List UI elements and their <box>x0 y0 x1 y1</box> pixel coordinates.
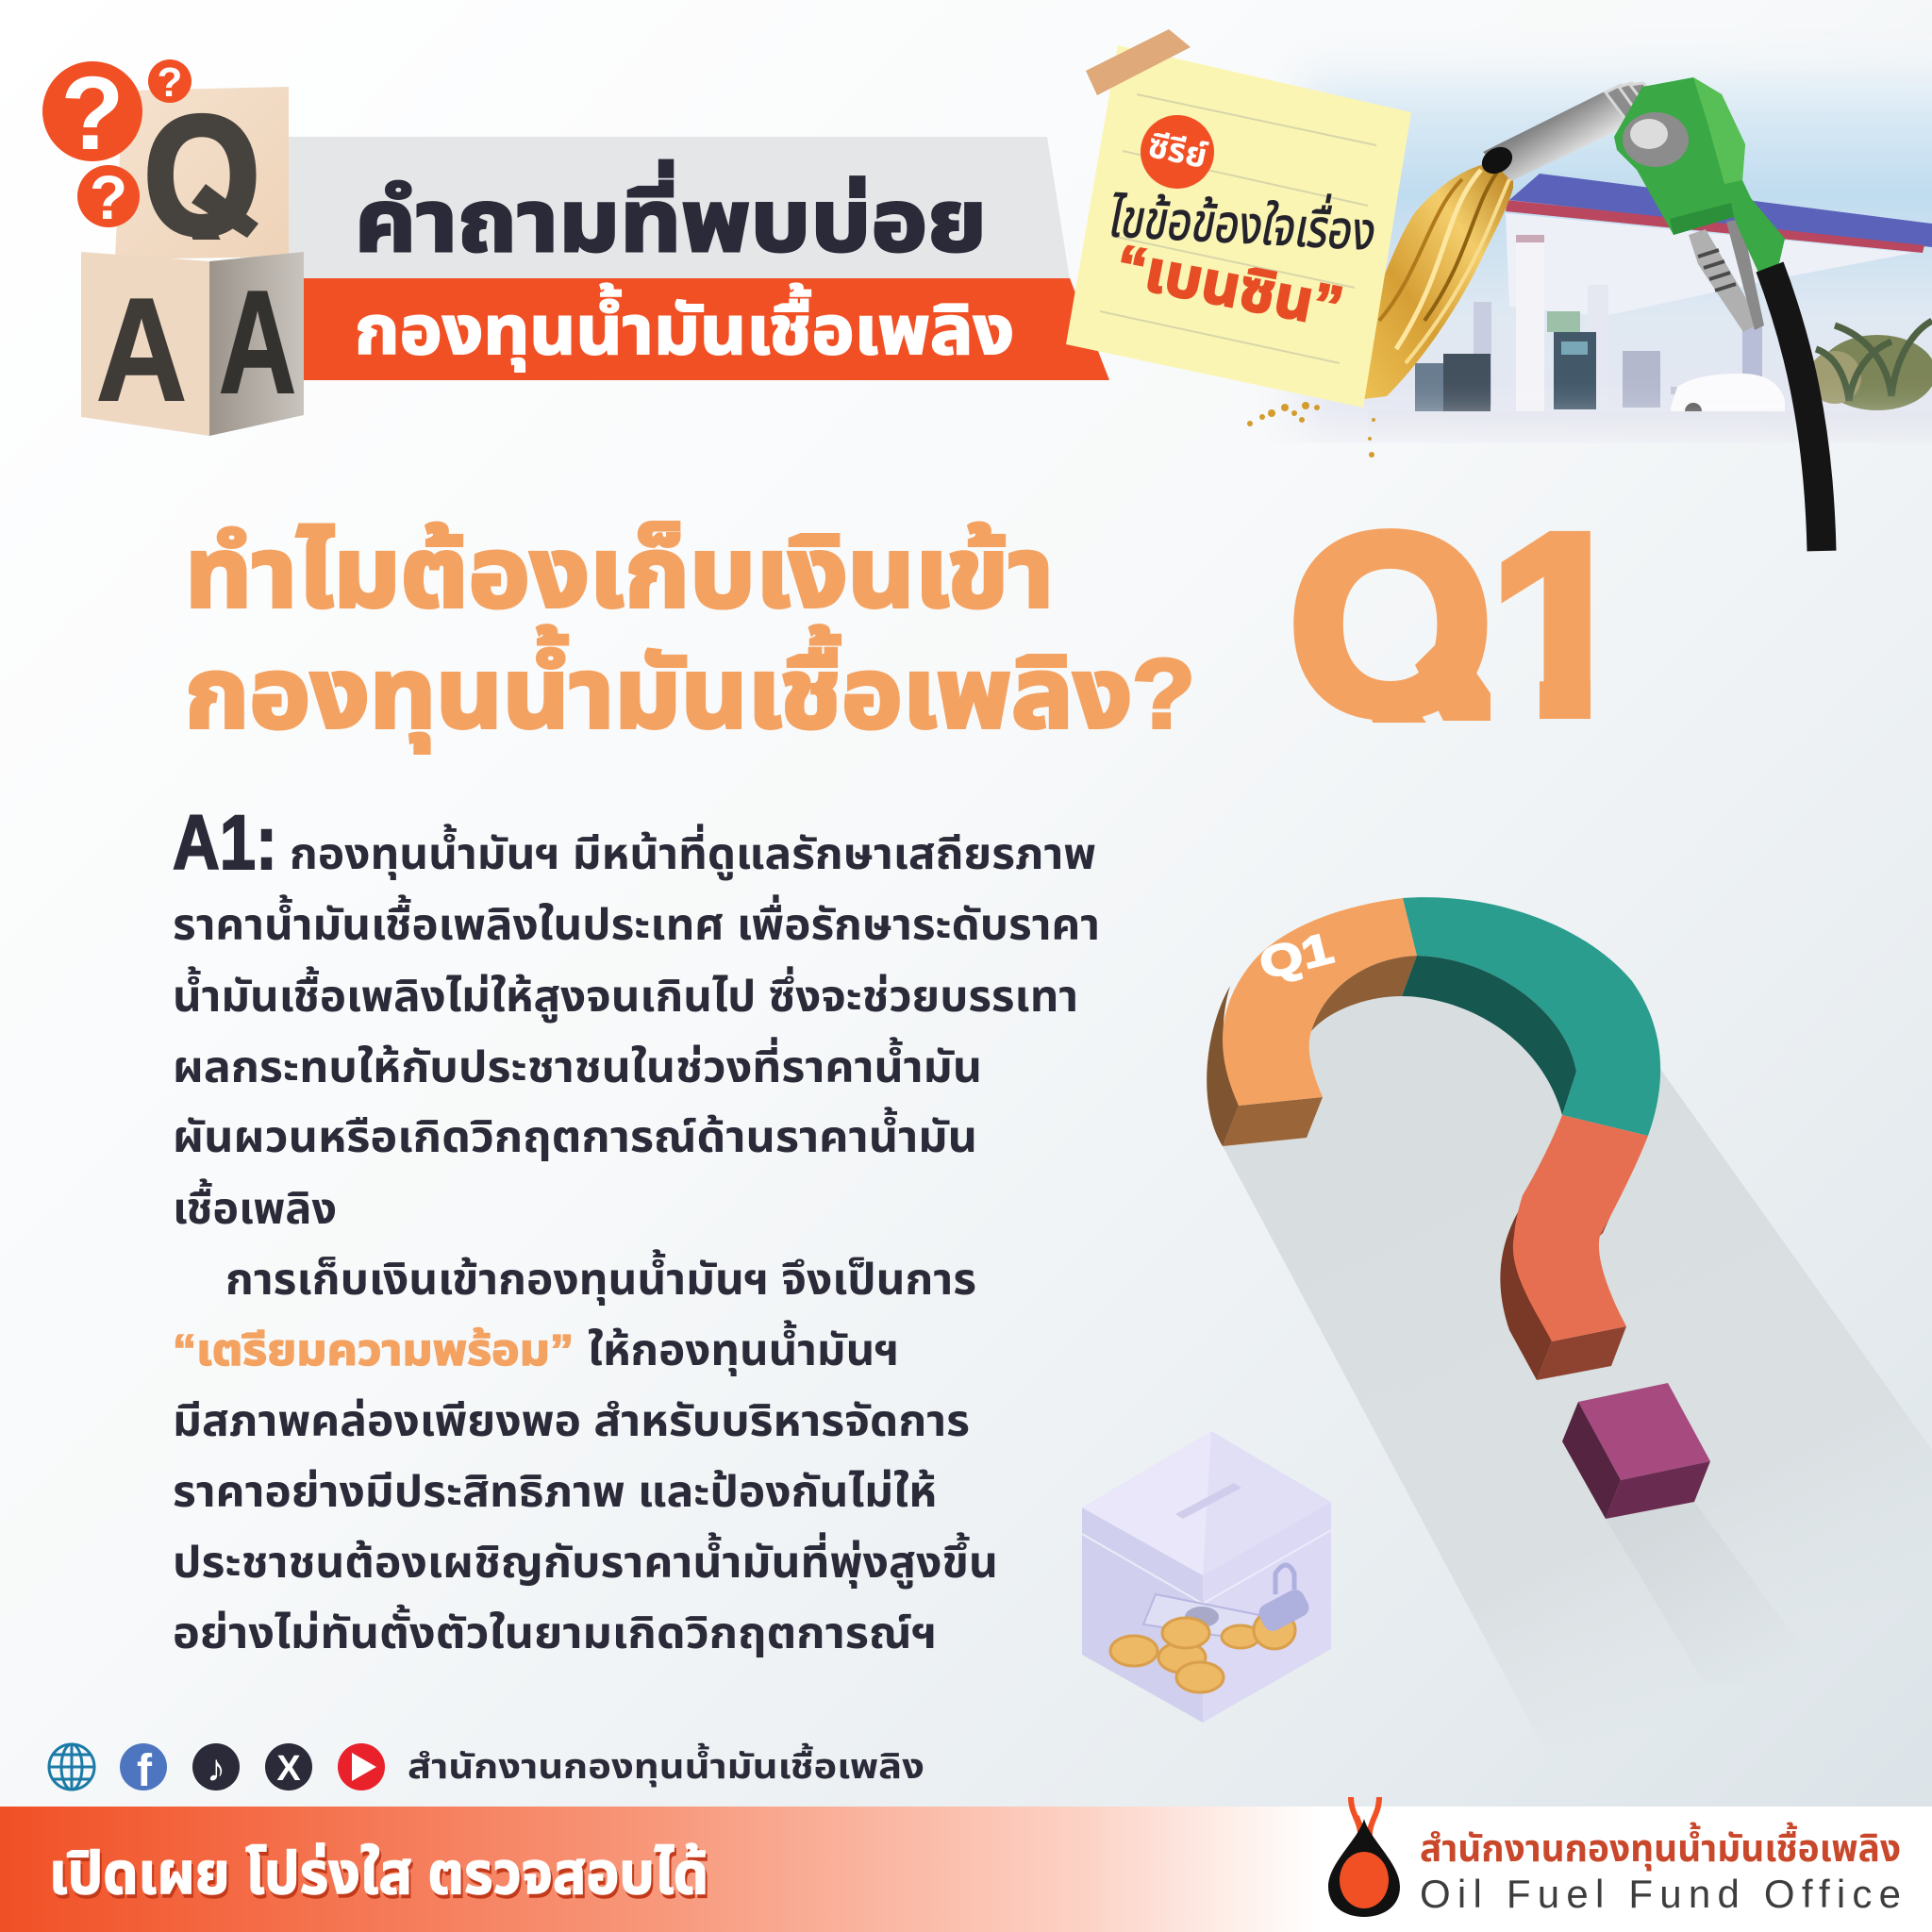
question bubble large <box>42 56 142 172</box>
heading line one: ทำไมต้องเก็บเงินเข้า <box>185 519 1054 628</box>
heading: frequently asked questions: คำถามที่พบบ่อย <box>355 160 987 270</box>
answer text block: อย่างไม่ทันตั้งตัวในยามเกิดวิกฤตการณ์ฯ <box>173 1605 937 1657</box>
icon: facebook <box>120 1743 167 1796</box>
box right face <box>1203 1502 1331 1723</box>
big Q1 label <box>1293 528 1591 723</box>
teal segment inner side <box>1402 956 1576 1115</box>
block A left face <box>81 252 209 436</box>
answer text block: ราคาน้ำมันเชื้อเพลิงในประเทศ เพื่อรักษาระดับราคา <box>173 894 1100 949</box>
logo Thai name: สำนักงานกองทุนน้ำมันเชื้อเพลิง <box>1420 1822 1901 1872</box>
footer bar <box>0 1807 1932 1932</box>
logo oil drop <box>1328 1819 1400 1917</box>
A1 label: A1: <box>173 800 277 886</box>
icon: X <box>265 1743 312 1790</box>
answer text block: เชื้อเพลิง <box>173 1178 337 1233</box>
padlock <box>1256 1565 1312 1634</box>
logo English name: Oil Fuel Fund Office <box>1420 1872 1901 1916</box>
red segment top <box>1513 1115 1648 1341</box>
big Q1 label: Q <box>1289 481 1492 768</box>
3D question mark <box>1207 897 1827 1684</box>
red segment sides <box>1500 1212 1552 1380</box>
fuel nozzle <box>1477 77 1785 332</box>
answer text block: ให้กองทุนน้ำมันฯ <box>588 1320 899 1376</box>
highlighted phrase: “เตรียมความพร้อม” <box>173 1325 574 1374</box>
subheading: oil fund: กองทุนน้ำมันเชื้อเพลิง <box>355 283 1014 372</box>
answer text block <box>173 800 1100 1657</box>
purple dot of question mark <box>1562 1383 1710 1519</box>
gas station photo backdrop <box>1298 66 1932 436</box>
icon: tiktok: ♪ <box>207 1748 225 1790</box>
question bubble left: ? <box>90 162 127 232</box>
oil stream and droplets <box>1247 161 1513 458</box>
answer text block: ผลกระทบให้กับประชาชนในช่วงที่ราคาน้ำมัน <box>173 1037 982 1091</box>
footer gradient band <box>0 1807 1932 1932</box>
banner orange strip <box>304 278 1109 380</box>
banknote <box>1143 1594 1259 1640</box>
icon: tiktok <box>192 1743 240 1790</box>
social links row <box>49 1742 924 1796</box>
footer slogan shadow and text: เปิดเผย โปร่งใส ตรวจสอบได้ <box>51 1845 710 1910</box>
icon: facebook: f <box>137 1746 153 1796</box>
answer text block: ประชาชนต้องเผชิญกับราคาน้ำมันที่พุ่งสูงขึ้น <box>173 1532 998 1589</box>
letter Q: Q <box>143 81 260 271</box>
fuel hose <box>1770 267 1822 551</box>
answer text block: มีสภาพคล่องเพียงพอ สำหรับบริหารจัดการ <box>173 1396 970 1445</box>
block Q <box>115 87 289 259</box>
money box illustration <box>1082 1431 1331 1723</box>
answer text block: น้ำมันเชื้อเพลิงไม่ให้สูงจนเกินไป ซึ่งจะช่วยบรรเทา <box>173 966 1078 1023</box>
series badge: ซีรีย์ <box>1144 125 1211 175</box>
orange segment sides <box>1207 986 1239 1146</box>
answer text block: ผันผวนหรือเกิดวิกฤตการณ์ด้านราคาน้ำมัน <box>173 1107 977 1161</box>
icon: youtube <box>338 1743 385 1790</box>
question bubble left <box>77 162 140 232</box>
letter A left: A <box>96 268 187 431</box>
box top face <box>1082 1431 1331 1575</box>
icon: website globe <box>49 1744 94 1790</box>
logo inner circle <box>1340 1852 1389 1908</box>
question bubble top <box>148 59 192 106</box>
series badge <box>1141 115 1214 189</box>
question heading <box>185 519 1195 753</box>
question bubble top: ? <box>158 59 182 106</box>
shadow of the dot <box>1606 1502 1827 1684</box>
answer text block: ราคาอย่างมีประสิทธิภาพ และป้องกันไม่ให้ <box>173 1467 937 1516</box>
note line one: ไขข้อข้องใจเรื่อง <box>1104 183 1383 261</box>
footer slogan shadow and text: เปิดเผย โปร่งใส ตรวจสอบได้ <box>49 1841 708 1907</box>
banner grey strip <box>289 137 1070 279</box>
wooden Q and A blocks <box>42 56 304 436</box>
logo: Oil Fuel Fund Office <box>1328 1797 1901 1917</box>
letter Q <box>147 113 258 240</box>
teal segment top <box>1403 897 1660 1136</box>
Q1 on the question mark: Q1 <box>1255 923 1338 989</box>
question bubble large: ? <box>60 56 125 172</box>
note paper <box>1066 45 1411 408</box>
answer text block: การเก็บเงินเข้ากองทุนน้ำมันฯ จึงเป็นการ <box>225 1249 976 1306</box>
block A right face <box>209 252 304 436</box>
long shadow of question mark <box>1223 906 1932 1774</box>
answer text block: กองทุนน้ำมันฯ มีหน้าที่ดูแลรักษาเสถียรภาพ <box>290 824 1096 880</box>
note line two: benzine: “เบนซิน” <box>1110 233 1348 341</box>
letter A right: A <box>219 260 296 424</box>
sticky note <box>1066 29 1411 408</box>
box left face <box>1082 1507 1203 1723</box>
icon: X: X <box>276 1749 301 1789</box>
header banner <box>289 137 1109 380</box>
office name: สำนักงานกองทุนน้ำมันเชื้อเพลิง <box>408 1742 924 1787</box>
heading line two: กองทุนน้ำมันเชื้อเพลิง? <box>185 625 1195 753</box>
tape <box>1086 29 1191 95</box>
coins <box>1110 1611 1295 1692</box>
big Q1 label: 1 <box>1490 481 1632 768</box>
orange segment top <box>1223 898 1417 1106</box>
logo flames <box>1351 1797 1379 1841</box>
